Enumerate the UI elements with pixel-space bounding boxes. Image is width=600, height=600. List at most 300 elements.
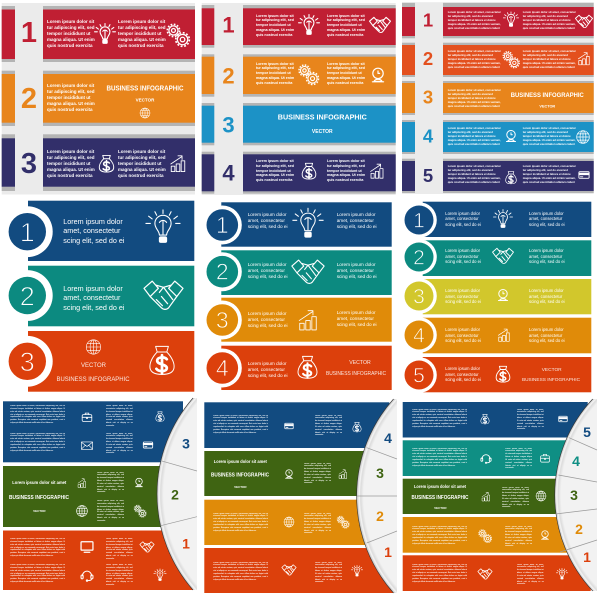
- text 1b: Lorem ipsum dolor sit amet, consectetur: [523, 11, 576, 14]
- text 4b: scing elit, sed do ei: [529, 338, 565, 343]
- text: Lorem ipsum dolor sit amet, consectetur adipiscing elit, sed do eiusmod tempor incididunt ut labore et dolore magna aliqua. Ut enim ad minim veniam, quis nostrud exercitation ullamco laboris nisi ut aliquip ex ea commodo consequat. Duis aute irure dolor in reprehenderit in voluptate velit esse cillum dolore eu fugiat nulla pariatur. Excepteur sint occaecat cupidatat non proident, sunt in culpa qui officia deserunt mollit anim id est laborum.: [10, 405, 65, 424]
- text 4a: Lorem ipsum dolor sit: [256, 159, 294, 163]
- text 3a: quis nostrud exercita: [47, 172, 93, 178]
- text 4a: quis nostrud exercita: [256, 178, 292, 182]
- text 4b: [529, 327, 565, 344]
- text: Lorem ipsum dolor sit amet, consectetur adipiscing elit, sed do eiusmod tempor incididunt ut labore et dolore magna aliqua. Ut enim ad minim veniam, quis nostrud exercitation ullamco laboris nisi ut aliquip ex ea commodo consequat. Duis aute irure dolor in reprehenderit in voluptate velit esse cillum dolore eu fugiat nulla pariatur. Excepteur sint occaecat cupidatat non proident, sunt in culpa qui officia deserunt mollit anim id est laborum.: [10, 564, 65, 583]
- text 4b: tempor incididunt ut: [327, 169, 362, 173]
- text 4b: magna aliqua. Ut enim ad minim veniam,: [523, 139, 576, 142]
- icon: bulb: [293, 208, 323, 237]
- row 1: 1: [413, 210, 425, 232]
- text 1b: tur adipiscing elit, sed do eiusmod: [523, 15, 568, 18]
- text 2a: quis nostrud exercita: [47, 106, 93, 112]
- row 1: [203, 202, 392, 247]
- text 2b: magna aliqua. Ut enim: [327, 76, 365, 80]
- text 3b: scing elit, sed do ei: [529, 299, 565, 304]
- panel: five rows with disc: [400, 395, 600, 595]
- text 2b: magna aliqua. Ut enim ad minim veniam,: [523, 62, 576, 65]
- text 4b: tur adipiscing elit, sed: [327, 164, 365, 168]
- number 2: 2: [575, 521, 583, 537]
- row 5 navy bar: [402, 159, 594, 193]
- icon: money bag: [150, 346, 174, 374]
- text 1b: amet, consectetur: [337, 218, 374, 223]
- text: Lorem ipsum dolor sit amet, consectetur adipiscing elit, sed do eiusmod tempor incididunt ut labore et dolore magna aliqua. Ut enim ad minim veniam, quis nostrud exercitation ullamco laboris nisi ut aliquip ex ea commodo consequat. Duis aute irure dolor in reprehenderit in voluptate velit esse cillum dolore eu fugiat nulla pariatur. Excepteur sint occaecat cupidatat non proident, sunt in culpa qui officia deserunt mollit anim id est laborum.: [412, 448, 467, 467]
- icon: globe: [536, 491, 546, 501]
- text 4a: amet, consectetur: [248, 367, 285, 372]
- number 4: 4: [222, 161, 235, 186]
- row 5 red bar: [403, 555, 591, 591]
- row 3 navy bar: [2, 134, 195, 191]
- icon: chart: [299, 311, 316, 330]
- text 2a: tempor incididunt ut: [47, 95, 90, 100]
- text 4b: amet, consectetur: [529, 333, 562, 338]
- text 1a: magna aliqua. Ut enim: [256, 28, 294, 32]
- text: Lorem ipsum dolor sit amet, consectetur adipiscing elit, sed do eiusmod tempor incididunt ut labore et dolore magna aliqua. Ut enim ad minim veniam, quis nostrud exercitation ullamco laboris nisi ut aliquip ex ea commodo consequat. Duis aute irure dolor in reprehenderit in voluptate velit esse cillum dolore eu fugiat nulla pariatur. Excepteur sint occaecat cupidatat non proident, sunt in culpa qui officia deserunt mollit anim id est laborum.: [213, 414, 268, 434]
- text 4b: Lorem ipsum dolor: [529, 327, 564, 332]
- text 1b: Lorem ipsum dolor sit: [327, 14, 365, 18]
- text 5a: magna aliqua. Ut enim ad minim veniam,: [448, 177, 501, 180]
- number 2: 2: [222, 63, 235, 88]
- text 4a: scing elit, sed do ei: [248, 373, 288, 378]
- text 5a: [445, 366, 481, 382]
- row 1: 1: [216, 212, 229, 238]
- heading: BUSINESS INFOGRAPHIC: [9, 495, 70, 501]
- row 1: [2, 201, 194, 261]
- icon: handshake: [478, 569, 492, 579]
- text 2b: Lorem ipsum dolor: [529, 248, 564, 253]
- icon: globe: [77, 506, 87, 516]
- text 2b: scing elit, sed do ei: [529, 259, 565, 264]
- icon: card: [285, 423, 293, 429]
- text 5b: [522, 165, 576, 184]
- text 1a: scing elit, sed do ei: [248, 224, 288, 229]
- number 1: 1: [583, 549, 591, 565]
- row 2 orange bar: [202, 54, 396, 97]
- icon: bulb: [494, 210, 512, 228]
- text 5a: Lorem ipsum dolor sit amet, consectetur: [448, 165, 501, 168]
- icon: money bag: [302, 163, 316, 179]
- text 3a: magna aliqua. Ut enim: [47, 167, 95, 172]
- text 3a: [448, 89, 501, 108]
- text 5a: Lorem ipsum dolor: [445, 366, 480, 371]
- text 2: [63, 284, 124, 312]
- text 3a: tur adipiscing elit, sed do eiusmod: [448, 93, 493, 96]
- panel: three circle rows: [8, 200, 194, 392]
- text 1a: scing elit, sed do ei: [445, 222, 481, 227]
- number 3: 3: [182, 436, 190, 452]
- icon: gears: [134, 505, 146, 517]
- text 1a: quis nostrud exercita: [47, 42, 93, 48]
- icon: gears: [167, 24, 189, 46]
- text 1b: tur adipiscing elit, sed: [327, 18, 365, 22]
- text 2b: amet, consectetur: [337, 268, 374, 273]
- row 4: [203, 346, 392, 390]
- text 5b: tur adipiscing elit, sed do eiusmod: [523, 169, 568, 172]
- text 1b: scing elit, sed do ei: [529, 222, 565, 227]
- icon: handshake: [292, 260, 324, 283]
- icon: money bag: [156, 412, 164, 421]
- row 2 orange bar: [2, 71, 195, 126]
- row 2: [203, 250, 392, 295]
- text 2a: tempor incididunt ut labore et dolore: [448, 58, 496, 61]
- text 3a: Lorem ipsum dolor sit amet, consectetur: [448, 89, 501, 92]
- text 4b: [522, 127, 576, 146]
- row 2 green bar: [3, 466, 183, 527]
- row 1 red bar: [2, 6, 195, 62]
- row 3: [2, 331, 194, 392]
- text 1a: tur adipiscing elit, sed: [47, 25, 95, 30]
- text 3b: tempor incididunt ut: [118, 161, 162, 166]
- vector label: VECTOR: [234, 485, 247, 489]
- text 1a: Lorem ipsum dolor: [445, 211, 480, 216]
- icon: bulb: [95, 24, 115, 43]
- text 2a: magna aliqua. Ut enim: [47, 101, 95, 106]
- icon: card: [579, 172, 589, 178]
- text 1b: tempor incididunt ut labore et dolore: [523, 19, 571, 22]
- text 2a: magna aliqua. Ut enim: [256, 76, 294, 80]
- text 3a: scing elit, sed do ei: [445, 299, 481, 304]
- text 2a: Lorem ipsum dolor sit: [256, 62, 294, 66]
- number 1: 1: [384, 544, 392, 560]
- text 1a: [448, 11, 501, 30]
- row 1 blue bar: [3, 401, 183, 462]
- text: Lorem ipsum dolor sit amet, consectetur adipiscing elit, sed do eiusmod tempor incididunt ut labore et dolore magna aliqua. Ut enim ad minim veniam, quis nostrud exercitation ullamco laboris nisi ut aliquip ex ea commodo consequat. Duis aute irure dolor in reprehenderit in voluptate velit esse cillum dolore eu fugiat nulla pariatur. Excepteur sint occaecat cupidatat non proident, sunt in culpa qui officia deserunt mollit anim id est laborum.: [213, 562, 268, 581]
- text 3a: tempor incididunt ut: [47, 161, 90, 166]
- number 2: 2: [423, 48, 433, 69]
- icon: monitor: [81, 542, 93, 552]
- text 1a: Lorem ipsum dolor sit: [256, 14, 294, 18]
- heading: BUSINESS INFOGRAPHIC: [106, 86, 184, 92]
- text 4a: magna aliqua. Ut enim ad minim veniam,: [448, 139, 501, 142]
- text 4a: Lorem ipsum dolor: [445, 327, 480, 332]
- vector label: VECTOR: [539, 105, 555, 109]
- text 3a: Lorem ipsum dolor sit: [47, 149, 94, 154]
- row 4 orange bar: [403, 517, 573, 553]
- vector label: VECTOR: [136, 98, 155, 102]
- number 3: 3: [376, 465, 384, 481]
- text 1a: Lorem ipsum dolor sit amet, consectetur: [448, 11, 501, 14]
- text 1a: magna aliqua. Ut enim ad minim veniam,: [448, 23, 501, 26]
- text 3b: Lorem ipsum dolor: [529, 288, 564, 293]
- icon: bulb: [556, 568, 568, 579]
- text 3b: Lorem ipsum dolor sit: [118, 149, 165, 154]
- text 1a: [248, 212, 288, 229]
- text 1b: [327, 14, 365, 37]
- text 2b: tempor incididunt ut: [327, 71, 362, 75]
- text 2a: tur adipiscing elit, sed do eiusmod: [448, 54, 493, 57]
- text 1a: magna aliqua. Ut enim: [47, 37, 95, 42]
- text 2: Lorem ipsum dolor: [63, 284, 123, 293]
- icon: bulb: [351, 565, 363, 576]
- number 5: 5: [423, 165, 433, 186]
- icon: money bag: [496, 366, 510, 382]
- icon: handshake: [282, 565, 296, 575]
- disc: [555, 399, 597, 591]
- text 3b: magna aliqua. Ut enim: [118, 167, 166, 172]
- text 5a: [448, 165, 501, 184]
- row 3: [401, 278, 591, 314]
- text 2a: magna aliqua. Ut enim ad minim veniam,: [448, 62, 501, 65]
- panel: four circle rows: [206, 202, 392, 390]
- row 1 blue bar: [403, 402, 588, 438]
- text 1b: Lorem ipsum dolor sit: [118, 19, 165, 24]
- text 3a: magna aliqua. Ut enim ad minim veniam,: [448, 101, 501, 104]
- text 2a: [256, 62, 294, 85]
- icon: headset: [481, 455, 491, 463]
- heading: BUSINESS INFOGRAPHIC: [326, 371, 386, 377]
- number 3: 3: [570, 487, 578, 503]
- text 2b: [522, 50, 576, 69]
- text 2b: Lorem ipsum dolor: [337, 262, 376, 267]
- text 4b: quis nostrud exercita: [327, 178, 363, 182]
- text 1b: quis nostrud exercita: [327, 33, 363, 37]
- text 3b: scing elit, sed do ei: [337, 322, 377, 327]
- row 2: 2: [20, 281, 35, 311]
- heading: BUSINESS INFOGRAPHIC: [56, 377, 130, 383]
- panel: three rows with disc: [0, 395, 200, 595]
- text 1a: [256, 14, 294, 37]
- text 3b: [336, 310, 377, 327]
- icon: webcam: [506, 130, 516, 142]
- vector label: VECTOR: [33, 509, 46, 513]
- text 1a: tempor incididunt ut: [256, 23, 291, 27]
- text 4b: quis nostrud exercitation ullamco labori: [523, 143, 575, 146]
- text 2a: Lorem ipsum dolor: [248, 262, 287, 267]
- icon: handshake: [370, 17, 390, 32]
- icon: webcam: [372, 68, 384, 82]
- icon: card: [143, 442, 153, 448]
- text 2a: Lorem ipsum dolor: [445, 248, 480, 253]
- number 4: 4: [572, 453, 580, 469]
- icon: chart: [482, 492, 490, 501]
- heading: BUSINESS INFOGRAPHIC: [211, 472, 270, 478]
- icon: globe: [86, 340, 101, 354]
- text 5a: amet, consectetur: [445, 372, 479, 376]
- text 2a: [47, 83, 95, 112]
- icon: webcam: [542, 531, 548, 539]
- text 4a: [248, 361, 288, 378]
- row 2 teal bar: [403, 440, 573, 476]
- icon: webcam: [498, 289, 508, 301]
- icon: webcam: [136, 478, 142, 487]
- text 3a: amet, consectetur: [248, 317, 285, 322]
- row 1 blue bar: [204, 402, 389, 448]
- text 2b: quis nostrud exercita: [327, 81, 363, 85]
- icon: gears: [337, 516, 349, 528]
- heading: BUSINESS INFOGRAPHIC: [412, 495, 469, 501]
- icon: bulb: [503, 12, 519, 26]
- text 1a: tempor incididunt ut labore et dolore: [448, 19, 496, 22]
- row 3: 3: [216, 307, 229, 333]
- row 2 green bar: [204, 451, 374, 496]
- text 1b: tempor incididunt ut: [118, 31, 162, 36]
- text 3a: scing elit, sed do ei: [248, 323, 288, 328]
- text 1b: quis nostrud exercitation ullamco labori: [523, 27, 575, 30]
- green line: Lorem ipsum dolor sit amet: [214, 459, 267, 464]
- icon: chart: [78, 479, 86, 488]
- icon: chart: [339, 470, 347, 478]
- text 4a: [256, 159, 294, 182]
- text 2a: tur adipiscing elit, sed: [256, 66, 294, 70]
- text 2a: [248, 262, 288, 279]
- disc: [357, 399, 397, 593]
- text 4b: [327, 159, 365, 182]
- text 2a: tur adipiscing elit, sed: [47, 89, 95, 94]
- vector label: VECTOR: [81, 363, 107, 369]
- text 1b: Lorem ipsum dolor: [337, 212, 376, 217]
- text 4a: magna aliqua. Ut enim: [256, 173, 294, 177]
- icon: case: [82, 413, 92, 422]
- text 1: scing elit, sed do ei: [63, 236, 124, 244]
- row 2: [401, 239, 591, 276]
- text 3b: quis nostrud exercita: [118, 172, 164, 178]
- row 5: [401, 357, 591, 393]
- text 1b: [336, 212, 377, 229]
- row 2: [2, 266, 194, 326]
- icon: bulb: [154, 569, 166, 581]
- text 5b: quis nostrud exercitation ullamco labori: [523, 181, 575, 184]
- icon: mail: [81, 442, 93, 449]
- text 1b: [529, 211, 565, 227]
- panel: five rows: [402, 2, 594, 194]
- number 3: 3: [423, 86, 433, 108]
- icon: gears: [479, 530, 492, 543]
- number 4: 4: [423, 126, 434, 147]
- icon: chart: [171, 156, 185, 172]
- text 2a: scing elit, sed do ei: [445, 259, 481, 264]
- text 5b: tempor incididunt ut labore et dolore: [523, 173, 571, 176]
- text 2b: tur adipiscing elit, sed: [327, 66, 365, 70]
- text 3b: amet, consectetur: [529, 294, 562, 299]
- vector label: VECTOR: [349, 360, 371, 366]
- text 2a: Lorem ipsum dolor sit: [47, 83, 94, 88]
- text 4a: tur adipiscing elit, sed: [256, 164, 294, 168]
- text 2a: scing elit, sed do ei: [248, 274, 288, 279]
- text 1a: amet, consectetur: [248, 218, 285, 223]
- icon: handshake: [575, 15, 593, 28]
- text 1b: scing elit, sed do ei: [337, 224, 377, 229]
- text 3a: [248, 311, 288, 328]
- text 4a: tempor incididunt ut labore et dolore: [448, 135, 496, 138]
- number 2: 2: [171, 486, 179, 502]
- icon: globe: [140, 108, 150, 118]
- row 1: [401, 202, 591, 238]
- row 3: 3: [413, 286, 425, 308]
- number 1: 1: [21, 17, 37, 49]
- text 4a: [448, 127, 501, 146]
- text 1b: amet, consectetur: [529, 216, 562, 221]
- text 4a: [445, 327, 481, 344]
- text 1b: [522, 11, 576, 30]
- text 2a: tempor incididunt ut: [256, 71, 291, 75]
- text 1b: magna aliqua. Ut enim: [327, 28, 365, 32]
- icon: money bag: [481, 414, 489, 424]
- icon: card: [559, 416, 567, 422]
- vector label: VECTOR: [542, 367, 562, 373]
- text 2a: quis nostrud exercitation ullamco labori: [448, 66, 500, 69]
- row 2: 2: [413, 246, 425, 270]
- text 1b: Lorem ipsum dolor: [529, 211, 564, 216]
- text 1a: quis nostrud exercitation ullamco labori: [448, 27, 500, 30]
- panel: four red orange blue navy rows: [202, 3, 396, 195]
- row 4 red bar: [204, 548, 393, 593]
- text 1a: tur adipiscing elit, sed: [256, 18, 294, 22]
- text 5a: tur adipiscing elit, sed do eiusmod: [448, 169, 493, 172]
- number 2: 2: [376, 508, 384, 524]
- text 3b: [529, 288, 565, 305]
- text 3b: tur adipiscing elit, sed: [118, 155, 166, 160]
- text 1b: tempor incididunt ut: [327, 23, 362, 27]
- text 2: amet, consectetur: [63, 293, 120, 302]
- green line: Lorem ipsum dolor sit amet: [414, 484, 467, 489]
- row 3 green bar: [403, 479, 573, 514]
- row 2: 2: [216, 259, 229, 285]
- text: Lorem ipsum dolor sit amet, consectetur adipiscing elit, sed do eiusmod tempor incididunt ut labore et dolore magna aliqua. Ut enim ad minim veniam, quis nostrud exercitation ullamco laboris nisi ut aliquip ex ea commodo consequat. Duis aute irure dolor in reprehenderit in voluptate velit esse cillum dolore eu fugiat nulla pariatur. Excepteur sint occaecat cupidatat non proident, sunt in culpa qui officia deserunt mollit anim id est laborum.: [213, 512, 268, 532]
- text: Lorem ipsum dolor sit amet, consectetur adipiscing elit, sed do eiusmod tempor incididunt ut labore et dolore magna aliqua. Ut enim ad minim veniam, quis nostrud exercitation ullamco laboris nisi ut aliquip ex ea commodo consequat. Duis aute irure dolor in reprehenderit in voluptate velit esse cillum dolore eu fugiat nulla pariatur. Excepteur sint occaecat cupidatat non proident, sunt in culpa qui officia deserunt mollit anim id est laborum.: [412, 564, 467, 583]
- number 1: 1: [222, 12, 235, 37]
- number 3: 3: [222, 112, 235, 137]
- text 4a: amet, consectetur: [445, 333, 479, 338]
- text 2b: quis nostrud exercitation ullamco labori: [523, 66, 575, 69]
- text 4b: tur adipiscing elit, sed do eiusmod: [523, 131, 568, 134]
- text 3a: [445, 288, 481, 304]
- row 4: 4: [216, 355, 229, 381]
- text 5a: quis nostrud exercitation ullamco labori: [448, 181, 500, 184]
- text 1a: [445, 211, 481, 227]
- number 5: 5: [583, 424, 591, 440]
- text 1a: tur adipiscing elit, sed do eiusmod: [448, 15, 493, 18]
- heading: BUSINESS INFOGRAPHIC: [511, 92, 584, 99]
- text 2b: tur adipiscing elit, sed do eiusmod: [523, 54, 568, 57]
- row 3: 3: [20, 347, 35, 377]
- icon: money bag: [298, 356, 317, 378]
- row 3 blue bar: [202, 103, 396, 145]
- icon: headset: [81, 571, 93, 581]
- number 3: 3: [21, 148, 37, 180]
- number 1: 1: [182, 536, 190, 552]
- text: Lorem ipsum dolor sit amet, consectetur adipiscing elit, sed do eiusmod tempor incididunt ut labore et dolore magna aliqua. Ut enim ad minim veniam, quis nostrud exercitation ullamco laboris nisi ut aliquip ex ea commodo consequat. Duis aute irure dolor in reprehenderit in voluptate velit esse cillum dolore eu fugiat nulla pariatur. Excepteur sint occaecat cupidatat non proident, sunt in culpa qui officia deserunt mollit anim id est laborum.: [10, 538, 65, 557]
- heading: BUSINESS INFOGRAPHIC: [522, 377, 581, 383]
- text 3a: tempor incididunt ut labore et dolore: [448, 97, 496, 100]
- text 1a: quis nostrud exercita: [256, 33, 292, 37]
- icon: bulb: [299, 15, 319, 34]
- row 3 orange bar: [402, 81, 594, 115]
- row 3: [203, 298, 392, 342]
- text 5a: tempor incididunt ut labore et dolore: [448, 173, 496, 176]
- icon: money bag: [353, 422, 361, 432]
- panel: five circle rows: [404, 202, 592, 392]
- heading: BUSINESS INFOGRAPHIC: [278, 112, 367, 122]
- text: Lorem ipsum dolor sit amet, consectetur adipiscing elit, sed do eiusmod tempor incididunt ut labore et dolore magna aliqua. Ut enim ad minim veniam, quis nostrud exercitation ullamco laboris nisi ut aliquip ex ea commodo consequat. Duis aute irure dolor in reprehenderit in voluptate velit esse cillum dolore eu fugiat nulla pariatur. Excepteur sint occaecat cupidatat non proident, sunt in culpa qui officia deserunt mollit anim id est laborum.: [412, 408, 467, 428]
- text 4a: quis nostrud exercitation ullamco labori: [448, 143, 500, 146]
- text 2b: [336, 262, 377, 279]
- icon: money bag: [506, 172, 516, 184]
- text 3a: Lorem ipsum dolor: [248, 311, 287, 316]
- row 1 red bar: [402, 3, 594, 38]
- number 2: 2: [21, 83, 37, 115]
- text 1a: tempor incididunt ut: [47, 31, 90, 36]
- row 3 orange bar: [204, 500, 374, 545]
- icon: handshake: [140, 542, 154, 552]
- text 1a: amet, consectetur: [445, 216, 479, 221]
- text 1: amet, consectetur: [63, 226, 120, 235]
- text 2a: [448, 50, 501, 69]
- row 5: 5: [413, 364, 425, 388]
- vector label: VECTOR: [312, 129, 333, 135]
- icon: bulb: [146, 210, 180, 242]
- text 4a: tur adipiscing elit, sed do eiusmod: [448, 131, 493, 134]
- text 4b: Lorem ipsum dolor sit: [327, 159, 365, 163]
